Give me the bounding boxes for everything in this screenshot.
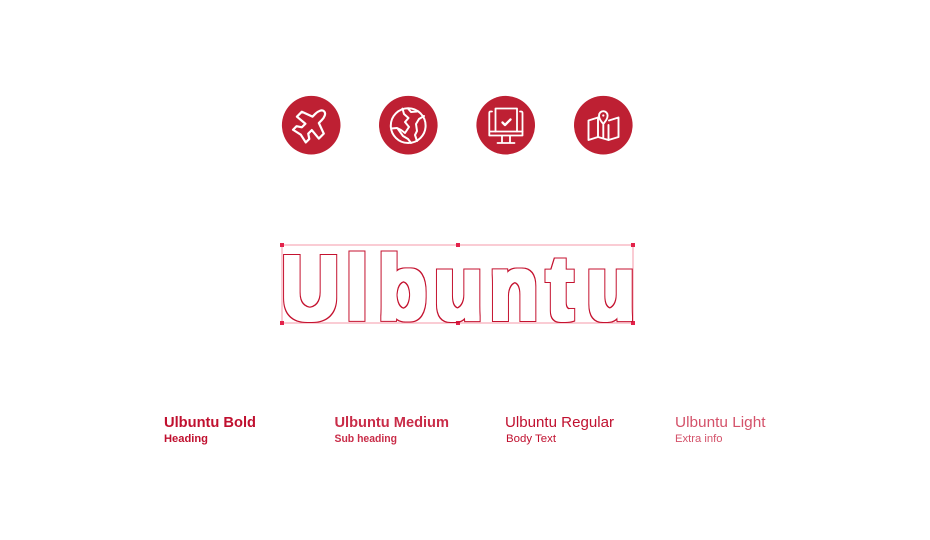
type sample: regular — [505, 415, 614, 445]
type sample: regular: Body Text — [506, 433, 556, 445]
icon: airplane — [282, 96, 341, 154]
type sample: light: Extra info — [675, 433, 722, 445]
icon: monitor with checklist — [476, 96, 535, 154]
type sample: medium: Sub heading — [334, 433, 397, 445]
type sample: light — [675, 415, 766, 445]
icon row — [282, 96, 633, 154]
type sample: medium — [334, 415, 449, 445]
type sample: medium: Ulbuntu Medium — [334, 415, 449, 431]
type sample: bold: Ulbuntu Bold — [164, 415, 256, 431]
icon: folded map with pin — [574, 96, 633, 154]
type sample: bold: Heading — [164, 433, 208, 445]
icon: globe — [379, 96, 438, 154]
type sample: bold — [164, 415, 256, 445]
type sample: regular: Ulbuntu Regular — [505, 415, 614, 431]
type sample: light: Ulbuntu Light — [675, 415, 766, 431]
outlined wordmark: Ulbuntu — [281, 239, 635, 339]
selection bounding box — [280, 243, 635, 325]
